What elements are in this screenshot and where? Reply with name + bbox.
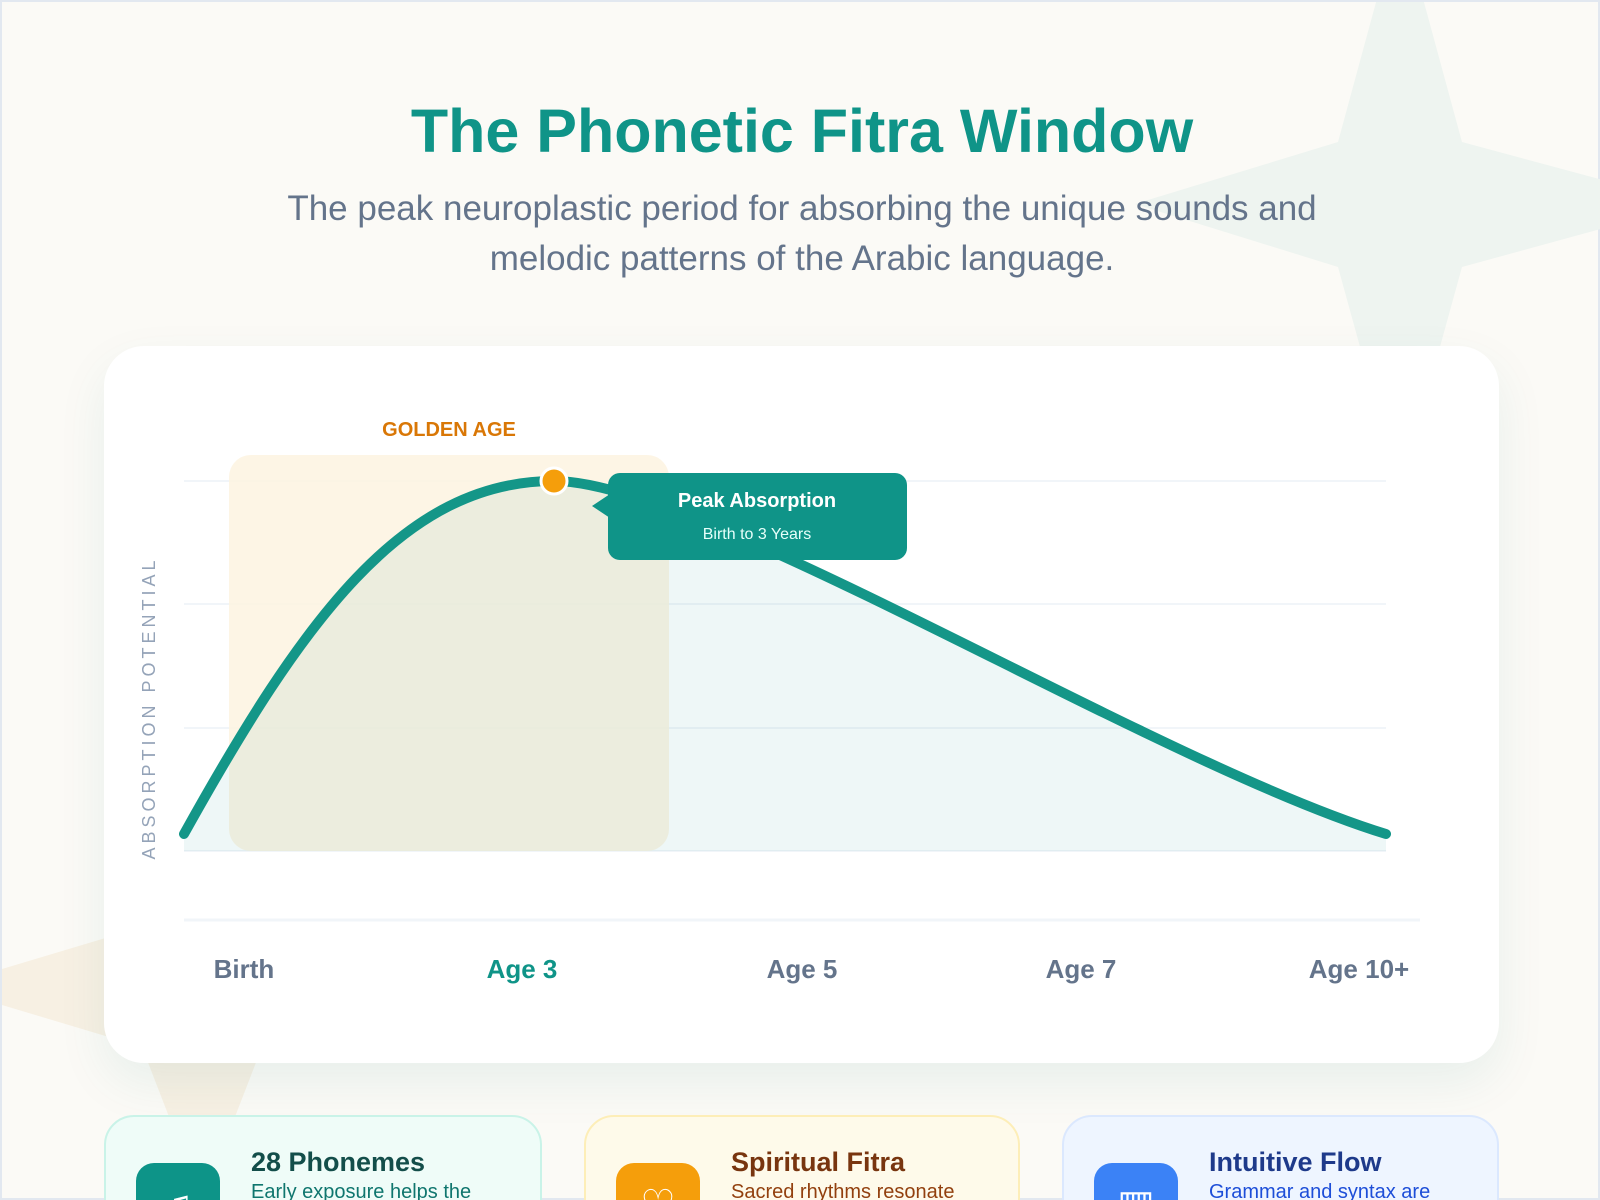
x axis labels: Age 7 xyxy=(1046,954,1116,984)
area under curve xyxy=(184,481,1386,851)
subtitle: melodic patterns of the Arabic language. xyxy=(490,239,1114,278)
x axis labels: Age 10+ xyxy=(1309,954,1409,984)
card: Spiritual Fitra xyxy=(584,1115,1020,1200)
icon: book xyxy=(1094,1163,1178,1200)
subtitle xyxy=(287,189,1317,278)
y axis label: ABSORPTION POTENTIAL xyxy=(139,556,159,860)
curve line xyxy=(184,481,1386,834)
subtitle: The peak neuroplastic period for absorbing the unique sounds and xyxy=(287,189,1317,228)
card: 28 Phonemes xyxy=(104,1115,542,1200)
tooltip: peak absorption: Peak Absorption xyxy=(678,490,836,512)
card: Spiritual Fitra: Spiritual Fitra xyxy=(731,1147,905,1177)
peak dot xyxy=(541,468,567,494)
golden age zone xyxy=(229,419,669,851)
tooltip: peak absorption xyxy=(592,473,907,560)
card: 28 Phonemes: 28 Phonemes xyxy=(251,1147,425,1177)
icon: heart xyxy=(616,1163,700,1200)
x axis labels: Age 5 xyxy=(767,954,837,984)
golden age zone: GOLDEN AGE xyxy=(382,419,516,441)
panel: chart card xyxy=(104,346,1499,1063)
tooltip: peak absorption: Birth to 3 Years xyxy=(703,526,811,543)
x axis labels xyxy=(214,954,1409,984)
icon: sound xyxy=(136,1163,220,1200)
card: Intuitive Flow xyxy=(1062,1115,1499,1200)
card: Intuitive Flow: Intuitive Flow xyxy=(1209,1147,1382,1177)
x axis labels: Age 3 xyxy=(487,954,557,984)
title: The Phonetic Fitra Window xyxy=(411,97,1193,165)
x axis labels: Birth xyxy=(214,954,274,984)
